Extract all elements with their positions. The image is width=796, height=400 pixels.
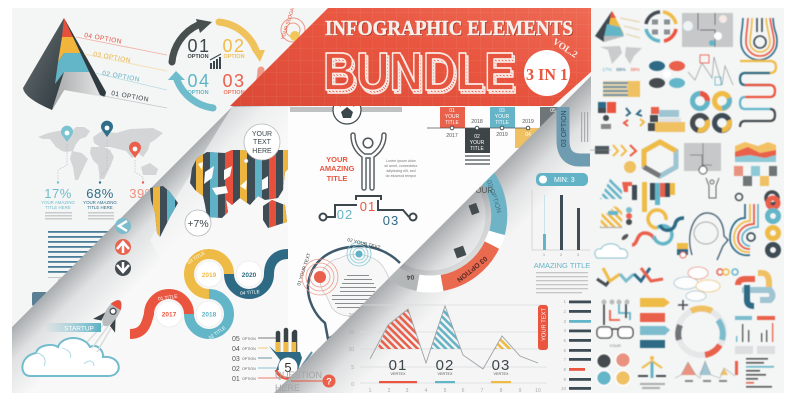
circuit numbers: 02 bbox=[337, 207, 353, 222]
line bbox=[370, 306, 538, 369]
panel: circular cycle bbox=[168, 19, 265, 108]
panel: number bars: 6 bbox=[563, 348, 566, 353]
mini donuts column bbox=[768, 198, 778, 256]
lorem text: do eiusmod tempor bbox=[386, 174, 417, 178]
map inlets bbox=[198, 162, 268, 195]
snake years: 2017 bbox=[162, 312, 177, 318]
mini cross bbox=[738, 273, 772, 306]
timeline strip: TITLE bbox=[495, 120, 509, 126]
clock icon bbox=[446, 186, 464, 204]
panel: vertex line chart: VERTEX bbox=[390, 372, 406, 376]
banner heading: INFOGRAPHIC ELEMENTS bbox=[326, 17, 574, 41]
y axis: 0 bbox=[351, 382, 354, 388]
banner heading: INFOGRAPHIC ELEMENTS bbox=[325, 16, 573, 40]
lorem text bbox=[384, 159, 418, 178]
mini world map bbox=[600, 46, 642, 64]
timeline strip: 2018 bbox=[471, 119, 483, 125]
mini bars bbox=[603, 81, 640, 97]
mini pie quartet bbox=[596, 352, 630, 386]
mini glasses title: YOUR bbox=[609, 343, 621, 348]
badge: 3 in 1 bbox=[524, 50, 570, 96]
snake titles: 04 TITLE bbox=[240, 289, 260, 297]
mini cycle bbox=[646, 12, 676, 41]
nav arrow icons bbox=[115, 218, 131, 276]
panel: striped world map bbox=[150, 150, 288, 237]
cycle labels: OPTION bbox=[187, 90, 209, 96]
x axis: 3 bbox=[406, 388, 409, 394]
vertex labels: 02 bbox=[436, 357, 454, 374]
y axis: 10 bbox=[348, 347, 354, 353]
map titles: TITLE HERE bbox=[45, 205, 71, 210]
x axis: 8 bbox=[500, 388, 503, 394]
mini hatched triangle bbox=[600, 177, 622, 199]
panel: person on podium bbox=[320, 135, 418, 228]
lorem text: adipiscing elit, sed bbox=[386, 169, 416, 173]
panel: number bars: 9 bbox=[563, 377, 566, 382]
mini maze bbox=[682, 13, 733, 47]
min pill bbox=[536, 173, 588, 186]
panel: min bar chart: MIN: 3 bbox=[554, 177, 575, 184]
mini percents: 39% bbox=[630, 67, 641, 73]
panel: segmented ring bbox=[371, 156, 502, 284]
panel: brain head bbox=[296, 237, 400, 339]
amazing title: AMAZING TITLE bbox=[534, 261, 590, 270]
panel: vertex line chart: VERTEX bbox=[437, 372, 453, 376]
timeline strip: TITLE bbox=[470, 146, 484, 152]
mini ring bbox=[678, 308, 724, 355]
panel: segmented ring: 04 bbox=[406, 273, 414, 281]
mini eye bbox=[624, 161, 636, 173]
bars panel corner bbox=[32, 292, 47, 306]
panel: horizontal bars bbox=[48, 231, 108, 282]
panel: number bars: 3 bbox=[563, 319, 566, 324]
panel: startup cloud bbox=[21, 300, 122, 377]
vol 2: VOL.2 bbox=[550, 37, 579, 61]
mini tops bbox=[602, 300, 630, 304]
circuit numbers: 03 bbox=[383, 213, 399, 228]
x axis: 5 bbox=[444, 388, 447, 394]
snake years: 2019 bbox=[202, 272, 217, 279]
map pins bbox=[57, 121, 144, 184]
banner bundle wordmark: BUNDLE bbox=[325, 45, 517, 105]
right column backdrop bbox=[591, 8, 784, 393]
brain text bbox=[332, 275, 376, 308]
panel: hand options: 03 bbox=[232, 356, 240, 363]
x axis: 9 bbox=[519, 388, 522, 394]
panel: brain head: 02 YOUR TEXT bbox=[347, 237, 381, 251]
mini bar list bbox=[746, 358, 774, 388]
mini person bbox=[706, 178, 719, 198]
pyramid option labels: 03 OPTION bbox=[93, 51, 131, 65]
cycle labels: 02 bbox=[222, 36, 246, 56]
map titles: YOUR AMAZING bbox=[83, 200, 117, 205]
timeline strip: 04 bbox=[525, 132, 531, 138]
mini line chart bbox=[688, 55, 733, 85]
panel: vertex line chart: VERTEX bbox=[493, 372, 509, 376]
panel: hand options: OPTION bbox=[242, 357, 256, 361]
x axis: 7 bbox=[481, 388, 484, 394]
y axis: 5 bbox=[351, 365, 354, 371]
cycle bar icon bbox=[210, 54, 221, 69]
cycle labels: OPTION bbox=[223, 54, 245, 60]
mini label arrows bbox=[640, 298, 670, 348]
question here: ? bbox=[326, 376, 332, 386]
vertex labels: 03 bbox=[492, 357, 510, 374]
panel: pyramid bbox=[23, 18, 167, 110]
panel: hand options: OPTION bbox=[242, 367, 256, 371]
smoke trail bbox=[87, 322, 111, 352]
timeline strip: 02 bbox=[474, 134, 480, 140]
band: 03 option: 03 OPTION bbox=[561, 110, 568, 147]
map layer sheet bbox=[150, 107, 288, 244]
mini concentric tubes bbox=[730, 204, 758, 255]
mini arrows row bbox=[590, 145, 636, 156]
timeline strip: TITLE bbox=[445, 120, 459, 126]
mini boxes bbox=[734, 166, 777, 186]
panel: hand options: OPTION bbox=[242, 337, 256, 341]
panel: number bars: 10 bbox=[561, 386, 566, 391]
panel: hand options: OPTION bbox=[242, 377, 256, 381]
question here: QUESTION bbox=[275, 370, 322, 380]
mini cloud bbox=[595, 244, 628, 258]
x axis: 4 bbox=[425, 388, 428, 394]
amazing title bbox=[320, 155, 355, 183]
badge: 3 in 1: 3 IN 1 bbox=[526, 65, 568, 84]
panel: number bars: 1 bbox=[563, 299, 566, 304]
snake years: 2018 bbox=[202, 312, 217, 318]
brain sketch bbox=[320, 254, 389, 316]
slogan target bbox=[280, 4, 305, 42]
question here bbox=[275, 370, 336, 393]
mini balance bbox=[638, 356, 666, 378]
vertex labels bbox=[389, 357, 510, 374]
mini glasses bbox=[597, 327, 633, 338]
snake centres bbox=[156, 261, 262, 327]
snake titles: 01 TITLE bbox=[158, 294, 178, 302]
underlines bbox=[379, 381, 417, 383]
amazing title: AMAZING bbox=[320, 164, 355, 173]
fold layer two bbox=[267, 0, 796, 400]
map percentages: 68% bbox=[86, 186, 114, 201]
pyramid option labels bbox=[84, 32, 149, 104]
panel: number bars: 4 bbox=[563, 328, 566, 333]
panel: startup cloud: STARTUP bbox=[64, 326, 94, 332]
pyramid option lines bbox=[76, 37, 167, 108]
mini bar pairs bbox=[735, 316, 775, 354]
target: teal bbox=[347, 242, 371, 266]
mini zigzag bbox=[597, 268, 663, 285]
timeline strip: 05 bbox=[550, 108, 556, 114]
panel: hand options: 02 bbox=[232, 366, 240, 373]
map captions bbox=[45, 212, 114, 220]
mini hand bbox=[677, 243, 688, 258]
pyramid option labels: 04 OPTION bbox=[84, 32, 122, 46]
cycle labels: OPTION bbox=[187, 54, 209, 60]
mini arrow dots bbox=[626, 207, 632, 225]
x axis: 10 bbox=[535, 388, 541, 394]
panel: hand options: 04 bbox=[232, 346, 240, 353]
hatched areas bbox=[377, 309, 421, 349]
mini balance caption bbox=[640, 383, 665, 389]
map titles: TITLE HERE bbox=[87, 205, 113, 210]
banner bbox=[230, 8, 591, 106]
callout: plus seven percent bbox=[185, 210, 211, 236]
cycle labels: 03 bbox=[222, 71, 246, 91]
mini footer icons bbox=[736, 192, 778, 204]
panel: number bars: 5 bbox=[563, 338, 566, 343]
x axis bbox=[369, 388, 541, 394]
timeline strip: 2019 bbox=[496, 132, 508, 138]
mini vertical path bbox=[740, 61, 776, 127]
panel: segmented ring: YOUR bbox=[470, 186, 493, 195]
timeline strip: 2017 bbox=[446, 133, 458, 139]
mini pyramid bbox=[595, 11, 640, 42]
timeline strip: 03 bbox=[499, 108, 505, 114]
pyramid option labels: 01 OPTION bbox=[111, 90, 149, 104]
ring labels: 03 OPTION bbox=[455, 254, 488, 283]
question here: HERE bbox=[275, 383, 300, 393]
mini yellow chart bbox=[600, 206, 622, 228]
mini discs bbox=[649, 61, 685, 88]
cycle labels: 01 bbox=[187, 36, 211, 56]
band: 03 option bbox=[561, 107, 590, 160]
snake years bbox=[162, 272, 257, 318]
panel: vertex line chart: YOUR TEXT bbox=[542, 307, 548, 341]
your text tab bbox=[538, 305, 548, 350]
bars bbox=[532, 190, 590, 250]
cycle labels: 04 bbox=[187, 71, 211, 91]
mini tiles bbox=[598, 102, 616, 129]
timeline strip: 01 bbox=[449, 108, 455, 114]
mini tubes bbox=[741, 18, 777, 60]
panel: vertex line chart bbox=[348, 305, 548, 394]
callout: your text here: YOUR bbox=[252, 131, 272, 138]
amazing title: YOUR bbox=[326, 155, 348, 164]
person icon bbox=[353, 135, 384, 188]
cycle labels bbox=[188, 39, 244, 94]
panel: min bar chart: 1 bbox=[543, 253, 545, 257]
callout: your text here: TEXT bbox=[253, 139, 272, 146]
ring icons bbox=[454, 203, 479, 258]
mini percents bbox=[602, 67, 641, 73]
map percentages bbox=[45, 189, 149, 198]
snake years: 2020 bbox=[242, 272, 257, 279]
startup band bbox=[45, 323, 101, 332]
callout: plus seven percent: +7% bbox=[187, 218, 209, 230]
circuit numbers: 01 bbox=[360, 199, 376, 214]
mini clouds bbox=[674, 267, 720, 301]
map titles bbox=[41, 201, 116, 209]
mini snake bbox=[632, 210, 684, 245]
callout: your text here: HERE bbox=[252, 148, 272, 155]
lorem text: Lorem ipsum dolor bbox=[386, 159, 417, 163]
panel: number bars: 8 bbox=[563, 367, 566, 372]
chart caption bbox=[536, 272, 588, 293]
panel: min bar chart: 2 bbox=[560, 253, 562, 257]
panel: number bars bbox=[561, 299, 591, 391]
mini arrows bbox=[624, 108, 644, 126]
panel: min bar chart bbox=[532, 173, 590, 293]
timeline blocks bbox=[440, 107, 465, 128]
lorem text: sit amet, consectetur bbox=[384, 164, 418, 168]
panel: segmented ring: 02 OPTION bbox=[485, 179, 502, 214]
fold layer one bbox=[12, 106, 292, 386]
map percentages: 39% bbox=[129, 186, 157, 201]
rocket bbox=[93, 300, 122, 332]
timeline strip: 2019 bbox=[522, 119, 534, 125]
panel: timeline snake bbox=[130, 250, 288, 341]
panel: hand options: 05 bbox=[232, 336, 240, 343]
pyramid option labels: 02 OPTION bbox=[102, 70, 140, 84]
x axis: 1 bbox=[369, 388, 372, 394]
panel: right preview column bbox=[590, 11, 778, 389]
panel: grey world map bbox=[38, 121, 163, 220]
head outline bbox=[308, 246, 400, 339]
mini pins bbox=[717, 269, 738, 275]
amazing title: TITLE bbox=[327, 174, 347, 183]
panel: hand options: 01 bbox=[232, 376, 240, 383]
snake titles: 03 TITLE bbox=[187, 250, 206, 266]
y axis: 15 bbox=[348, 330, 354, 336]
x axis: 2 bbox=[388, 388, 391, 394]
mini percents: 68% bbox=[616, 67, 627, 73]
mini brain head bbox=[690, 213, 728, 260]
vertex labels: 01 bbox=[389, 357, 407, 374]
mini percents: 17% bbox=[602, 67, 613, 73]
callout: your text here bbox=[244, 124, 280, 163]
timeline strip: YOUR bbox=[470, 140, 485, 146]
cycle labels: OPTION bbox=[223, 90, 245, 96]
mini pitch bbox=[684, 143, 721, 174]
y axis bbox=[348, 313, 354, 388]
cloud bbox=[22, 338, 119, 376]
mini vertex chart bbox=[675, 361, 738, 382]
mini blocks bbox=[648, 107, 685, 132]
snake titles: 02 TITLE bbox=[208, 325, 227, 341]
mini area chart bbox=[735, 142, 776, 162]
panel: hand options: OPTION bbox=[242, 347, 256, 351]
circuit numbers bbox=[337, 199, 399, 228]
mini sticks bbox=[604, 304, 630, 325]
brain layer sheet bbox=[288, 107, 304, 169]
timeline strip bbox=[290, 106, 556, 165]
x axis: 6 bbox=[462, 388, 465, 394]
hand icon: 5 bbox=[284, 360, 292, 375]
panel: number bars: 2 bbox=[563, 309, 566, 314]
snake titles bbox=[158, 250, 260, 341]
soccer ball bbox=[332, 106, 362, 125]
y axis: 20 bbox=[348, 313, 354, 319]
mini hexagon bbox=[644, 142, 676, 176]
timeline strip: YOUR bbox=[495, 114, 510, 120]
slogan target: YOUR SLOGAN bbox=[280, 4, 297, 41]
mini people bbox=[678, 300, 688, 310]
mini donuts bbox=[692, 94, 730, 130]
brain labels: 01 YOUR TEXT bbox=[296, 252, 312, 287]
panel background bbox=[12, 8, 328, 326]
map percentages: 17% bbox=[44, 186, 72, 201]
banner bundle wordmark: BUNDLE bbox=[323, 42, 515, 102]
panel: number bars: 7 bbox=[563, 357, 566, 362]
target: red bbox=[302, 259, 338, 295]
panel: min bar chart: 3 bbox=[577, 253, 579, 257]
mini striped map bbox=[622, 182, 675, 212]
panel: horizontal bars: AUG SEP OCT NOV DEC bbox=[58, 278, 102, 282]
circuit bbox=[327, 196, 409, 217]
map titles: YOUR AMAZING bbox=[41, 200, 75, 205]
mini rocket bbox=[621, 233, 629, 241]
panel: hand options bbox=[232, 330, 326, 383]
timeline strip: YOUR bbox=[445, 114, 460, 120]
